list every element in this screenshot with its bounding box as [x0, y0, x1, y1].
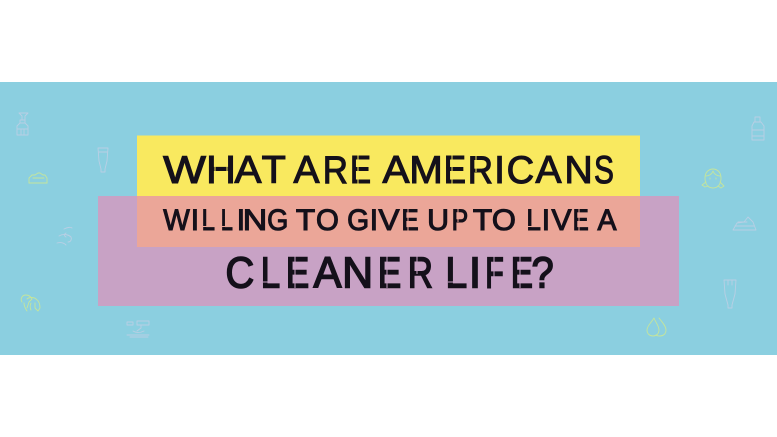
title line 3: N [342, 248, 373, 298]
title line 3: L [445, 248, 467, 298]
panel: yellow block [137, 136, 640, 196]
title line 2: G [347, 204, 369, 237]
title line 3: E [511, 248, 533, 298]
title line 1: H [206, 149, 236, 192]
title line 1: W [163, 149, 206, 192]
title line 1: A [294, 149, 320, 192]
icon: bottle right [752, 117, 764, 140]
title line 2: V [552, 204, 572, 237]
title line 2: P [452, 204, 468, 237]
title line 2: O [492, 204, 516, 237]
title line 1: E [444, 149, 466, 192]
icon: hair strand [57, 227, 72, 245]
title line 1: M [409, 149, 443, 192]
icon: lotion tube left [98, 148, 108, 172]
title line 2: O [316, 204, 339, 237]
title line 1: I [494, 149, 505, 192]
title line 2: L [202, 204, 215, 237]
title line 3: ? [532, 248, 554, 298]
title line 3: E [378, 248, 401, 298]
title line 2: N [243, 204, 267, 237]
title line 2: W [163, 204, 190, 237]
title line 3: A [314, 248, 342, 298]
title line 1: S [594, 149, 614, 192]
icon: soap bar [29, 173, 47, 183]
title line 2: G [267, 204, 288, 237]
title line 1: A [382, 149, 410, 192]
title line 1: A [234, 149, 262, 192]
title line 3: R [408, 248, 433, 298]
title line 1: R [323, 149, 348, 192]
title line 1: T [262, 149, 285, 192]
title line 2: L [221, 204, 233, 237]
title line 3: E [286, 248, 309, 298]
panel: salmon block [137, 196, 640, 247]
icon: spray bottle [17, 113, 28, 135]
title line 2: E [573, 204, 589, 237]
title line 2: I [191, 204, 199, 237]
icon: face [702, 169, 724, 188]
title line 2: L [526, 204, 541, 237]
icon: hands [21, 295, 40, 311]
title line 1: E [350, 149, 371, 192]
title line 2: I [542, 204, 550, 237]
icon: water drops [647, 318, 666, 336]
title line 3: F [485, 248, 504, 298]
title line 2: U [427, 204, 449, 237]
icon: towels [733, 217, 756, 230]
title line 2: V [378, 204, 400, 237]
title line 3: L [261, 248, 280, 298]
title line 2: E [401, 204, 419, 237]
title line 2: T [473, 204, 492, 237]
icon: razor and comb [127, 321, 149, 337]
title line 3: I [469, 248, 481, 298]
title line 2: A [598, 204, 616, 237]
panel: purple block [98, 196, 679, 306]
title line 1: N [564, 149, 593, 192]
title line 3: C [226, 248, 254, 298]
background band [0, 82, 777, 355]
icon: lotion tube right [724, 280, 736, 308]
title line 1: A [536, 149, 562, 192]
title line 2: I [237, 204, 245, 237]
title line 1: C [507, 149, 534, 192]
title line 2: I [370, 204, 378, 237]
title line 2: T [296, 204, 315, 237]
title line 1: R [468, 149, 493, 192]
